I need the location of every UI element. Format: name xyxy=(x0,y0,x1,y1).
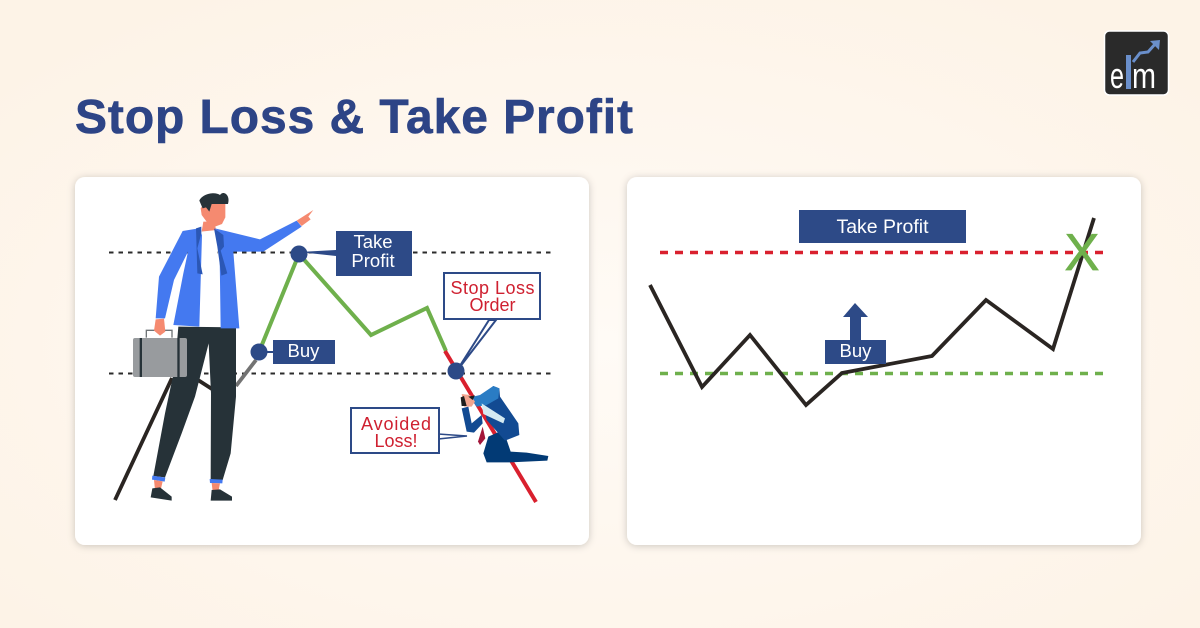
briefcase handle xyxy=(146,330,172,338)
green price line xyxy=(259,254,446,352)
cuffs xyxy=(152,476,223,483)
raised arm xyxy=(470,386,499,407)
marker: take profit point xyxy=(290,246,336,262)
lapels xyxy=(196,227,227,276)
callout: avoided loss: Loss! xyxy=(374,431,418,451)
take profit level xyxy=(660,251,1105,254)
black price line xyxy=(115,378,212,500)
callout: avoided loss: Avoided xyxy=(361,414,431,434)
character: man pointing xyxy=(133,193,313,501)
callout: stop loss order: Order xyxy=(469,295,516,315)
gray price line xyxy=(236,360,256,386)
callout: stop loss order: Stop Loss xyxy=(450,278,534,298)
character: crouching businessman xyxy=(461,386,548,462)
label: buy: Buy xyxy=(288,340,320,361)
title: Stop Loss & Take Profit xyxy=(75,91,633,144)
label: take profit: Profit xyxy=(351,250,395,271)
logo: elm xyxy=(1104,31,1168,96)
briefcase xyxy=(133,338,187,377)
jacket xyxy=(156,221,302,328)
label: take profit xyxy=(336,231,412,276)
label: take profit xyxy=(799,210,966,243)
tie xyxy=(478,427,485,445)
jacket xyxy=(482,386,519,441)
label: buy xyxy=(825,340,886,364)
label: take profit: Take xyxy=(353,231,393,252)
logo: elm: e xyxy=(1110,55,1124,96)
logo: elm: m xyxy=(1132,55,1156,96)
trousers xyxy=(483,430,548,462)
legs xyxy=(153,327,236,480)
label: buy xyxy=(273,340,335,364)
green x marker: X xyxy=(1065,224,1099,282)
buy level xyxy=(660,372,1105,375)
callout: avoided loss xyxy=(351,408,467,453)
gripping hand xyxy=(154,319,165,336)
price line xyxy=(650,218,1094,405)
label: take profit: Take Profit xyxy=(836,216,929,238)
shoes xyxy=(151,487,232,501)
ankles xyxy=(154,480,220,492)
head and arm xyxy=(462,394,475,407)
neck and face xyxy=(202,222,217,236)
callout: stop loss order xyxy=(444,273,540,319)
label: buy: Buy xyxy=(840,340,872,361)
shirt xyxy=(482,403,505,423)
hair xyxy=(199,193,229,212)
pointing hand xyxy=(297,210,313,226)
panel: take profit chart xyxy=(627,177,1141,545)
marker: stop loss point xyxy=(448,320,496,380)
panel: stop loss chart xyxy=(75,177,589,545)
upper dotted level xyxy=(109,252,552,254)
marker: buy point xyxy=(250,344,275,360)
lower dotted level xyxy=(109,372,552,374)
red price line xyxy=(445,351,536,502)
shirt xyxy=(199,230,221,327)
arrow: up xyxy=(843,303,868,341)
